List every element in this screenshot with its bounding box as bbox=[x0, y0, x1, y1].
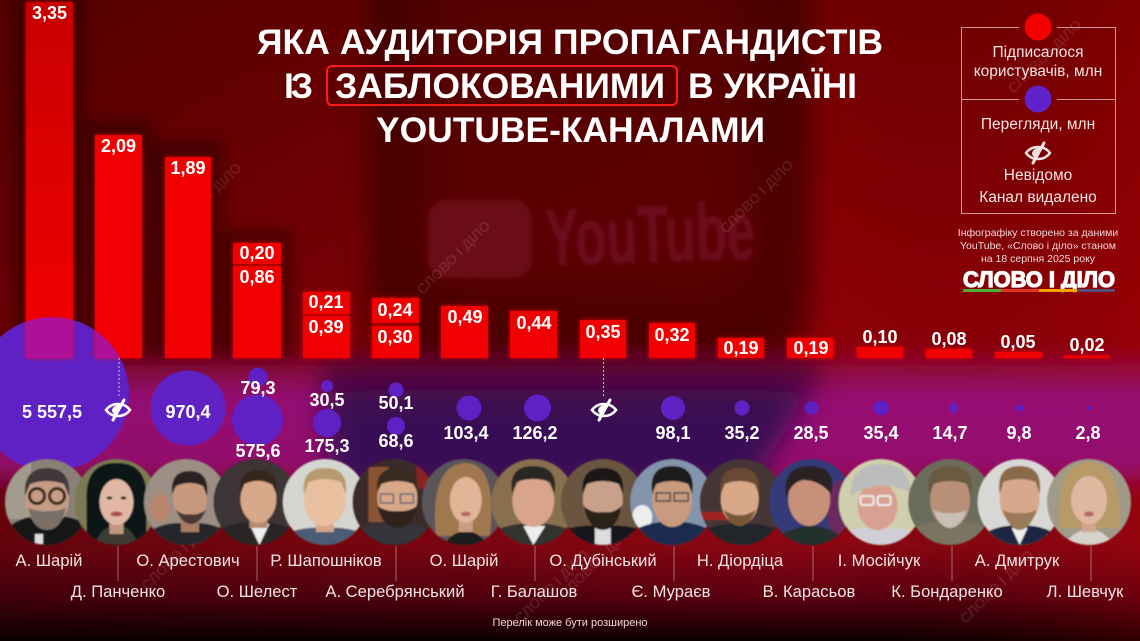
names: Л. Шевчук bbox=[1047, 582, 1124, 601]
portrait: А. Серебрянський bbox=[352, 459, 436, 545]
names: О. Шелест bbox=[217, 582, 298, 601]
bar: К. Бондаренко bbox=[926, 349, 972, 358]
bubble values: 98,1 bbox=[655, 423, 691, 443]
names: Р. Шапошніков bbox=[270, 551, 382, 570]
bar: О. Шарій bbox=[441, 306, 488, 358]
logo: Слово і Діло: СЛОВО І ДІЛО bbox=[963, 267, 1115, 292]
bubble values: 5 557,5 bbox=[22, 402, 82, 422]
watermarks: СЛОВО І ДІЛО bbox=[1004, 16, 1085, 97]
background: blurred YouTube logo bbox=[428, 186, 757, 284]
bar values: 0,08 bbox=[931, 329, 967, 349]
title bbox=[257, 22, 883, 150]
bubble values: 575,6 bbox=[235, 441, 281, 461]
background: magenta band bbox=[0, 345, 1140, 495]
portrait: І. Мосійчук bbox=[839, 459, 923, 545]
bar values: 0,49 bbox=[447, 307, 483, 327]
legend text: Перегляди, млн bbox=[981, 116, 1095, 133]
bar chart: subscribers bbox=[26, 2, 1110, 358]
footnote: Перелік може бути розширено bbox=[492, 617, 648, 629]
legend text: Підписалося bbox=[992, 44, 1084, 61]
names bbox=[16, 551, 1124, 601]
background: dark purple curtain bbox=[322, 358, 830, 490]
bar halos bbox=[14, 0, 292, 358]
names: І. Мосійчук bbox=[838, 551, 921, 570]
bar: Р. Шапошніков bbox=[303, 292, 350, 358]
bar values: 0,32 bbox=[654, 325, 690, 345]
bar values: 0,35 bbox=[585, 322, 621, 342]
bar: І. Мосійчук bbox=[857, 347, 903, 358]
portrait: О. Арестович bbox=[144, 459, 228, 545]
watermarks: СЛОВО І ДІЛО bbox=[413, 217, 494, 298]
bar values: 3,35 bbox=[32, 3, 67, 23]
bar: В. Карасьов bbox=[787, 338, 833, 358]
bar values: 0,44 bbox=[516, 313, 552, 333]
portrait: К. Бондаренко bbox=[908, 459, 992, 545]
bar values: 0,02 bbox=[1069, 335, 1105, 355]
bar values: 0,39 bbox=[308, 317, 344, 337]
bar values: 0,86 bbox=[239, 267, 275, 287]
legend text: Канал видалено bbox=[979, 189, 1097, 206]
title: ІЗ bbox=[284, 66, 313, 106]
title highlight box bbox=[327, 66, 677, 105]
bubble values: 970,4 bbox=[165, 402, 211, 422]
portrait: О. Дубінський bbox=[561, 459, 645, 545]
source note: на 18 серпня 2025 року bbox=[981, 253, 1096, 265]
bubble values: 35,2 bbox=[724, 423, 760, 443]
bar: А. Серебрянський bbox=[372, 298, 419, 358]
names: Г. Балашов bbox=[491, 582, 577, 601]
bar values: 0,21 bbox=[308, 292, 344, 312]
background: blurred YouTube frame bbox=[370, 0, 810, 360]
bar: Г. Балашов bbox=[510, 311, 557, 358]
portrait: А. Шарій bbox=[5, 459, 89, 545]
bar: Є. Мураєв bbox=[649, 323, 695, 358]
watermarks: СЛОВО І ДІЛО bbox=[716, 156, 797, 237]
legend text bbox=[974, 44, 1102, 206]
names: А. Серебрянський bbox=[325, 582, 465, 601]
title: В УКРАЇНІ bbox=[688, 66, 857, 106]
bar values bbox=[32, 3, 1105, 358]
bubble values: 30,5 bbox=[309, 390, 345, 410]
bubble values: 103,4 bbox=[443, 423, 489, 443]
names: О. Шарій bbox=[430, 551, 498, 570]
portrait: Р. Шапошніков bbox=[283, 459, 367, 545]
bubble values: 126,2 bbox=[512, 423, 558, 443]
legend: views marker bbox=[1024, 86, 1052, 112]
bar: О. Дубінський bbox=[580, 320, 626, 358]
legend: unknown icon bbox=[1026, 143, 1050, 163]
title: ЯКА АУДИТОРІЯ ПРОПАГАНДИСТІВ bbox=[257, 22, 883, 62]
bar: Л. Шевчук bbox=[1064, 356, 1110, 358]
portrait: Д. Панченко bbox=[74, 459, 158, 545]
names: О. Дубінський bbox=[549, 551, 657, 570]
background: blurred YouTube logo: YouTube bbox=[543, 186, 757, 284]
portrait: О. Шелест bbox=[213, 459, 297, 545]
bar values: 0,24 bbox=[377, 300, 413, 320]
names: О. Арестович bbox=[136, 551, 240, 570]
watermarks: СЛОВО І ДІЛО bbox=[138, 513, 219, 594]
bubble values: 2,8 bbox=[1075, 423, 1101, 443]
watermarks: СЛОВО І ДІЛО bbox=[556, 521, 637, 602]
bubble values: 68,6 bbox=[378, 431, 414, 451]
bar values: 2,09 bbox=[101, 136, 136, 156]
names: В. Карасьов bbox=[763, 582, 855, 601]
portrait: В. Карасьов bbox=[769, 459, 855, 545]
bar values: 0,05 bbox=[1000, 332, 1036, 352]
watermarks bbox=[138, 16, 1085, 627]
name separators bbox=[118, 546, 1091, 581]
bar: А. Шарій bbox=[26, 2, 73, 358]
bubble chart: views bbox=[150, 368, 1091, 446]
bar: О. Арестович bbox=[165, 157, 211, 358]
legend panel bbox=[962, 14, 1116, 214]
icon: unknown views, Д. Панченко bbox=[106, 400, 130, 420]
bubble values: 79,3 bbox=[240, 378, 276, 398]
bubble and bar overlap bbox=[26, 317, 120, 358]
names: Є. Мураєв bbox=[631, 582, 711, 601]
bar: Д. Панченко bbox=[95, 135, 142, 358]
watermarks: СЛОВО І ДІЛО bbox=[164, 159, 245, 240]
source note: Інфографіку створено за даними bbox=[958, 227, 1118, 239]
title: ЗАБЛОКОВАНИМИ bbox=[335, 66, 665, 106]
portrait: Є. Мураєв bbox=[630, 459, 714, 545]
source note bbox=[958, 227, 1118, 265]
bar values: 0,10 bbox=[862, 327, 898, 347]
legend: subscribers marker bbox=[1024, 14, 1052, 40]
bar values: 0,19 bbox=[723, 338, 759, 358]
dashed connectors bbox=[119, 358, 604, 398]
bar: Н. Діордіца bbox=[718, 338, 764, 358]
bubble values: 28,5 bbox=[793, 423, 829, 443]
bubble values: 50,1 bbox=[378, 393, 414, 413]
portrait: Н. Діордіца bbox=[700, 459, 784, 545]
bubble values: 14,7 bbox=[932, 423, 968, 443]
bubble values: 35,4 bbox=[863, 423, 899, 443]
icon: unknown views, О. Дубінський bbox=[592, 400, 616, 420]
bubble values: 9,8 bbox=[1006, 423, 1032, 443]
names: А. Дмитрук bbox=[975, 551, 1060, 570]
watermarks: СЛОВО І ДІЛО bbox=[511, 546, 592, 627]
watermarks: СЛОВО І ДІЛО bbox=[956, 546, 1037, 627]
portrait: О. Шарій bbox=[422, 459, 506, 545]
bar values: 0,30 bbox=[377, 327, 413, 347]
bubble values bbox=[22, 378, 1101, 461]
bar values: 0,19 bbox=[793, 338, 829, 358]
bubble values: 175,3 bbox=[304, 436, 350, 456]
portrait: А. Дмитрук bbox=[978, 459, 1062, 545]
names: Н. Діордіца bbox=[697, 551, 784, 570]
legend text: користувачів, млн bbox=[974, 63, 1102, 80]
portraits row bbox=[5, 459, 1131, 545]
names: Д. Панченко bbox=[71, 582, 165, 601]
title: YOUTUBE-КАНАЛАМИ bbox=[376, 110, 765, 150]
names: А. Шарій bbox=[16, 551, 82, 570]
bar: О. Шелест bbox=[233, 243, 281, 358]
source note: YouTube, «Слово і діло» станом bbox=[960, 240, 1116, 252]
bar values: 0,20 bbox=[239, 243, 275, 263]
bubble: А. Шарій views bbox=[0, 317, 129, 471]
bar: А. Дмитрук bbox=[995, 352, 1042, 358]
legend text: Невідомо bbox=[1004, 167, 1072, 184]
portrait: Л. Шевчук bbox=[1047, 459, 1131, 545]
portrait: Г. Балашов bbox=[491, 459, 575, 545]
names: К. Бондаренко bbox=[891, 582, 1003, 601]
bar values: 1,89 bbox=[170, 158, 206, 178]
